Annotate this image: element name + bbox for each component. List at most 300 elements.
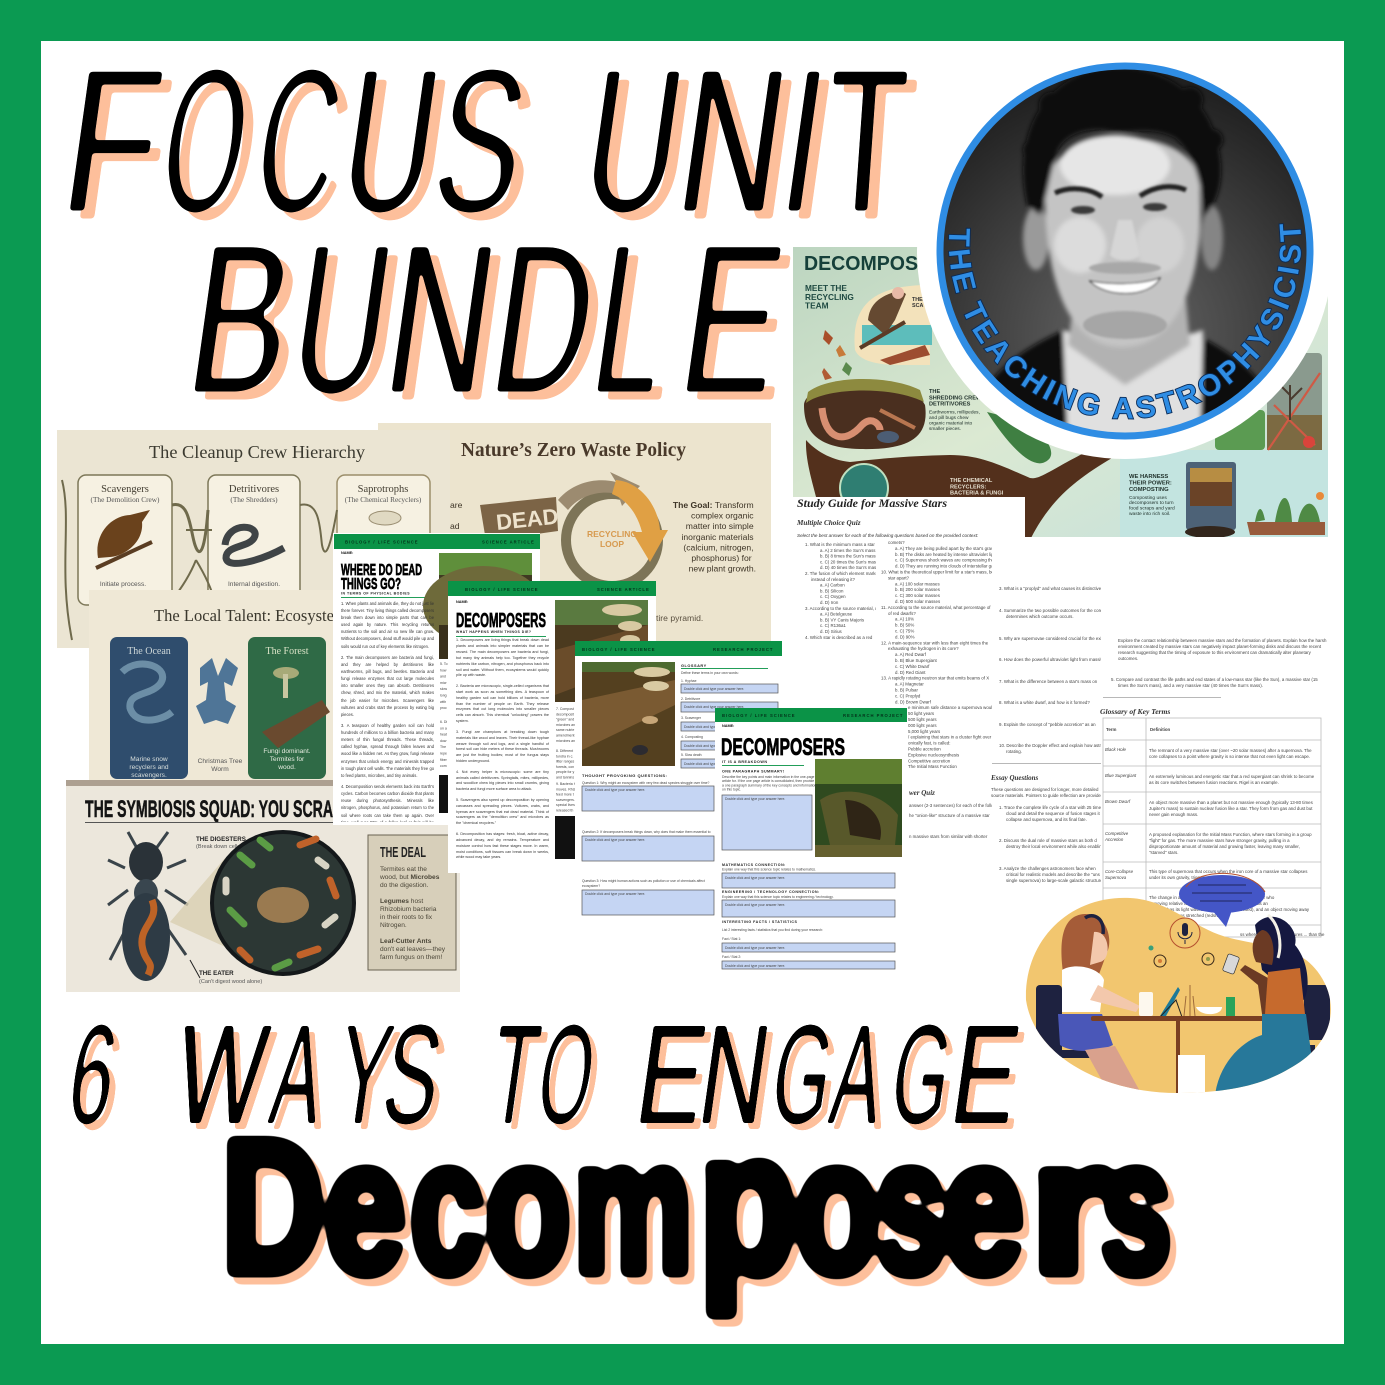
connection boxes: ENGINEERING / TECHNOLOGY CONNECTION: bbox=[722, 890, 820, 894]
title: Decomposers: c bbox=[410, 1101, 484, 1313]
table: glossary: Blue Supergiant bbox=[1105, 773, 1137, 778]
table: glossary: "fight" for gas. The more massive stars have stronger gravity, pulling in a bbox=[1149, 838, 1290, 843]
column one questions bbox=[805, 542, 876, 639]
right column sliver and callout: and tannins bbox=[556, 776, 574, 780]
right column sliver and callout: slow bbox=[440, 687, 447, 691]
labels: digesters and eater: THE EATER bbox=[199, 970, 234, 977]
table: glossary: ss where the extreme pressures ... than the bbox=[1240, 932, 1325, 937]
glossary section: 2. Detritivore bbox=[681, 697, 700, 701]
table: glossary: has its light waves stretched (redshifted). bbox=[1149, 913, 1229, 918]
column one questions: c. C) 20 times the Sun's mass bbox=[820, 559, 879, 564]
scene: chemical recyclers soil band: BACTERIA & FUNGI bbox=[950, 491, 1004, 497]
connection boxes: INTERESTING FACTS / STATISTICS bbox=[722, 920, 797, 924]
summary section: Describe the key points and main information in the one-page bbox=[722, 775, 814, 779]
title: 6 WAYS TO ENGAGE: Y bbox=[328, 996, 402, 1154]
column one questions: instead of releasing it? bbox=[811, 577, 855, 582]
connection boxes: Double click and type your answer here. bbox=[725, 964, 785, 968]
text: instructions: Select the best answer for each of the following questions based on the provided context: bbox=[797, 533, 979, 538]
card: The Forest: Fungi dominant. bbox=[263, 748, 311, 755]
right column sliver and callout: micr bbox=[440, 681, 447, 685]
title: FOCUS UNIT: U bbox=[330, 27, 452, 257]
glossary section: 4. Composting bbox=[681, 735, 703, 739]
doc text column: 2. Bacteria are microscopic, single-celled organisms that start work as soon as something dies. A teaspoon of healthy garden soil can hold billions of bacteria, more than the number of people on Earth. They release enzymes that cut long molecules into smaller pieces cells can absorb. This chemical "unlocking" powers the system. bbox=[456, 684, 549, 723]
title: FOCUS UNIT: O bbox=[150, 25, 262, 256]
column two questions: a. A) They are being pulled apart by the star's gravity. bbox=[895, 546, 998, 551]
card: Saprotrophs bbox=[337, 475, 430, 605]
doc text column: 6. Decomposition has stages: fresh, bloat, active decay, advanced decay, and dry remains. Temperature and moisture control how fast these stages move. In warm, moist conditions, soft tissues can break down in weeks, while wood may take years. bbox=[456, 832, 549, 859]
column two questions: 500 light years bbox=[908, 717, 937, 722]
scene: scavenger vulture: SCA bbox=[912, 303, 923, 309]
card: The Forest: Termites for bbox=[270, 756, 305, 763]
questions section: Question 1: Why might an ecosystem with very few dead species struggle over time? bbox=[582, 781, 710, 785]
glossary section: Double click and type your answer here. bbox=[684, 762, 744, 766]
labels: digesters and eater: (Can't digest wood alone) bbox=[199, 979, 262, 985]
card: The Ocean: Marine snow bbox=[130, 756, 168, 763]
labels: digesters and eater: THE DIGESTERS bbox=[196, 836, 246, 843]
doc header bar bbox=[575, 641, 782, 656]
right column sliver and callout: microbes an bbox=[556, 723, 575, 727]
portrait: the teaching astrophysicist bbox=[917, 62, 1328, 459]
text: we harness their power: THEIR POWER: bbox=[1129, 480, 1172, 486]
table: glossary: An object more massive than a planet but not massive enough (typically 13-80 times bbox=[1149, 800, 1314, 805]
table: glossary: Definition bbox=[1150, 727, 1171, 732]
doc header bar: BIOLOGY / LIFE SCIENCE bbox=[722, 713, 796, 718]
title: 6 WAYS TO ENGAGE bbox=[60, 995, 1029, 1154]
column two questions: c. C) Supernova shock waves are compressing them into that shape. bbox=[895, 558, 1029, 563]
title: BUNDLE: D bbox=[480, 200, 609, 438]
table: glossary: An extremely luminous and energetic star that a red supergiant can shrink to become bbox=[1149, 774, 1315, 779]
right column sliver and callout: how bbox=[440, 668, 447, 672]
column one questions: 1. What is the minimum mass a star needs bbox=[805, 542, 889, 547]
scene: chemical recyclers soil band bbox=[806, 412, 1112, 540]
heading: essay questions: Essay Questions bbox=[990, 774, 1039, 782]
panel: Nature's Zero Waste Policy slide: are bbox=[450, 500, 463, 510]
title: 6 WAYS TO ENGAGE: E bbox=[628, 995, 716, 1153]
title: FOCUS UNIT: N bbox=[666, 25, 800, 256]
right column sliver and callout: tundra in c. bbox=[556, 754, 573, 758]
table items bbox=[1091, 985, 1271, 1093]
doc title: WHERE DO DEAD bbox=[341, 562, 422, 579]
panel: Nature's Zero Waste Policy slide: ad bbox=[450, 521, 460, 531]
right column sliver and callout: decomposit bbox=[556, 712, 574, 716]
scene: chemical recyclers soil band: RECYCLERS: bbox=[950, 484, 986, 490]
icon: christmas tree worm: Worm bbox=[211, 766, 229, 773]
icon: christmas tree worm bbox=[196, 658, 243, 773]
short answer lines: 6. How does the powerful ultraviolet light from massive bbox=[999, 657, 1106, 662]
column one questions: a. A) Betelgeuse bbox=[820, 612, 853, 617]
title: FOCUS UNIT: I bbox=[770, 26, 838, 256]
title: 6 WAYS TO ENGAGE: W bbox=[167, 996, 277, 1153]
panel: research project doc - glossary bbox=[575, 641, 782, 923]
right column sliver and callout: released th bbox=[556, 808, 573, 812]
panel: article doc - where do dead things go bbox=[333, 533, 543, 825]
table: glossary: Jupiter's mass) to sustain nuclear fusion like a star. They form from gas and dust but bbox=[1149, 806, 1313, 811]
table: glossary: never gain enough mass. bbox=[1149, 812, 1198, 817]
column two questions: d. D) Brown Dwarf bbox=[895, 699, 932, 704]
panel: research project doc - decomposers summary: IT IS A BREAKDOWN bbox=[722, 760, 768, 764]
card: The Forest: The Forest bbox=[265, 646, 309, 657]
questions section: Double click and type your answer here. bbox=[585, 838, 645, 842]
text: meet the recycling team: MEET THE bbox=[805, 283, 847, 293]
title: BUNDLE bbox=[176, 200, 796, 439]
person left bbox=[1058, 914, 1142, 1095]
panel: research project doc - decomposers summary: NAME: bbox=[722, 724, 734, 728]
column one questions: a. A) 2 times the Sun's mass bbox=[820, 548, 876, 553]
callout: The Deal: Leaf-Cutter Ants bbox=[380, 938, 432, 945]
text: we harness their power: COMPOSTING bbox=[1129, 487, 1169, 493]
right column sliver and callout: moves. Rhiz bbox=[556, 787, 576, 791]
table: glossary: core collapses to a point where gravity is so intense that not even light can escape. bbox=[1149, 754, 1310, 759]
table: glossary: Brown Dwarf bbox=[1105, 799, 1131, 804]
summary section: Double click and type your answer here. bbox=[725, 797, 785, 801]
scene: leaves falling bbox=[822, 330, 852, 380]
right column sliver and callout: microbes an bbox=[556, 739, 575, 743]
text: meet the recycling team: TEAM bbox=[805, 301, 829, 311]
doc text column: 1. Decomposers are living things that break down dead plants and animals into simpler materials that can be reused. The main decomposers are bacteria and fungi, but many tiny animals help too. Together they recycle nutrients like carbon, nitrogen, and phosphorus back into soil and water. Without them, ecosystems would quickly pile up with waste. bbox=[456, 638, 549, 677]
connection boxes: Fact / Stat 2: bbox=[722, 955, 741, 959]
column two questions: c. C) White Dwarf bbox=[895, 664, 930, 669]
brows bbox=[1055, 187, 1186, 197]
questions section: ecosystem? bbox=[582, 884, 600, 888]
glossary section: Double click and type your answer here. bbox=[684, 687, 744, 691]
short answer lines: single supernova) to large-scale galactic structure bbox=[1006, 878, 1103, 883]
column one questions: d. D) Sirius bbox=[820, 629, 843, 634]
essay continued text: outcomes. bbox=[1118, 656, 1138, 661]
panel: article doc - decomposers: WHAT HAPPENS WHEN THINGS DIE? bbox=[456, 630, 531, 634]
scene: scavenger vulture: THE bbox=[912, 297, 923, 303]
doc title: DECOMPOSERS bbox=[721, 734, 845, 761]
callout: The Deal: Legumes host bbox=[380, 898, 423, 905]
title: FOCUS UNIT bbox=[51, 25, 913, 257]
text: meet the recycling team: RECYCLING bbox=[805, 292, 854, 302]
hair bbox=[1023, 67, 1221, 215]
doc photo: log illustration bbox=[582, 662, 675, 766]
right column sliver and callout bbox=[439, 662, 448, 813]
column two questions: / explaining that stars in a cluster fight over bbox=[908, 735, 992, 740]
icon: recycling loop: LOOP bbox=[600, 539, 624, 549]
text: we harness their power: waste into rich soil. bbox=[1129, 511, 1170, 517]
title: 6 WAYS TO ENGAGE: A bbox=[262, 995, 334, 1153]
callout: The Deal bbox=[368, 835, 456, 970]
text: shredding crew: smaller pieces. bbox=[929, 426, 961, 432]
column two questions: a. A) 10% bbox=[895, 617, 914, 622]
icon: compost bin bbox=[1185, 462, 1236, 538]
column two questions: d. D) 90% bbox=[895, 634, 915, 639]
summary section: a one paragraph summary of the key concepts and information bbox=[722, 783, 816, 787]
glossary section: 1. Hyphae bbox=[681, 679, 697, 683]
neck bbox=[1068, 290, 1190, 385]
summary section bbox=[722, 770, 817, 850]
title: 6 WAYS TO ENGAGE: O bbox=[529, 995, 604, 1153]
table: glossary: is moving relative to the source; an object moving towards an bbox=[1149, 901, 1268, 906]
table: glossary bbox=[1103, 718, 1325, 937]
column one questions: d. D) Iron bbox=[820, 600, 839, 605]
right column sliver and callout: feed more t bbox=[556, 793, 574, 797]
table: glossary: This type of supernova that occurs when the iron core of a massive star collapses bbox=[1149, 869, 1308, 874]
scene: shredding soil bbox=[804, 379, 926, 449]
right column sliver and callout: 6. Di bbox=[440, 720, 447, 724]
title: 6 WAYS TO ENGAGE: E bbox=[943, 995, 1029, 1153]
heading: study guide: Study Guide for Massive Stars bbox=[797, 497, 947, 510]
column two questions: b. B) The disks are heated by intense ultraviolet light, which drives material away bbox=[895, 552, 1053, 557]
column two questions: Explosive nucleosynthesis bbox=[908, 752, 960, 757]
labels: digesters and eater: (Break down cellulose) bbox=[196, 844, 253, 850]
column two questions: 10. What is the theoretical upper limit for a star's mass, beyond which the radiation bbox=[881, 570, 1042, 574]
connection boxes: List 2 interesting facts / statistics that you find during your research: bbox=[722, 928, 823, 932]
callout: The Deal: wood, but Microbes bbox=[380, 874, 439, 881]
callout: The Deal: farm fungus on them! bbox=[380, 954, 442, 961]
panel: article doc - decomposers bbox=[448, 581, 656, 873]
right column sliver and callout: com bbox=[440, 764, 447, 768]
doc text column bbox=[456, 638, 549, 862]
chairs bbox=[1036, 985, 1330, 1058]
column two questions: of red dwarfs? bbox=[888, 611, 916, 616]
glossary section bbox=[681, 663, 778, 768]
glossary section: 5. Slow death bbox=[681, 753, 702, 757]
right column sliver and callout: 7. Compost bbox=[556, 707, 574, 711]
card: The Forest: wood. bbox=[277, 764, 296, 771]
panel: study guide document: n massive stars from similar with shorter bbox=[909, 834, 988, 839]
short answer lines: 5. Why are supernovae considered crucial for the existence of planets like Earth bbox=[999, 636, 1155, 641]
text block: the goal: new plant growth. bbox=[689, 564, 756, 574]
table: glossary: "starved" stars. bbox=[1149, 850, 1178, 855]
doc header bar bbox=[334, 534, 540, 549]
table: glossary: Competitive bbox=[1105, 831, 1129, 836]
table: glossary: observer has its light waves compressed (blueshifted), and an object moving away bbox=[1149, 907, 1310, 912]
column two questions: The Initial Mass Function bbox=[908, 764, 957, 769]
card: Scavengers: Scavengers bbox=[101, 484, 149, 495]
doc text column: 5. Scavengers also speed up decomposition by opening carcasses and spreading pieces. Vultures, crabs, and hyenas are scavengers that eat dead material. Think of scavengers as the "demolition crew" and microbes as the "chemical recyclers." bbox=[456, 798, 549, 825]
column two questions: e minimum safe distance a supernova would bbox=[908, 705, 995, 710]
right column sliver and callout: 9. Bacteria h bbox=[556, 782, 576, 786]
text: we harness their power: food scraps and yard bbox=[1129, 506, 1175, 512]
heading: The Symbiosis Squad: THE SYMBIOSIS SQUAD: YOU SCRA bbox=[85, 796, 333, 823]
text: shredding crew: Earthworms, millipedes, bbox=[929, 410, 980, 416]
title: Decomposers: o bbox=[794, 1101, 880, 1313]
glossary section: Double click and type your answer here. bbox=[684, 705, 744, 709]
card: Scavengers bbox=[78, 475, 172, 605]
right column sliver and callout: dow bbox=[440, 739, 447, 743]
column two questions: a. A) Magnetar bbox=[895, 682, 924, 687]
short answer lines: rotating. bbox=[1006, 749, 1022, 754]
text: we harness their power: WE HARNESS bbox=[1129, 474, 1168, 480]
right column sliver and callout: same nutrie bbox=[556, 728, 574, 732]
right column sliver and callout: 8. Different bbox=[556, 749, 573, 753]
column two questions: star apart? bbox=[888, 575, 910, 580]
callout: The Deal: don't eat leaves—they bbox=[380, 946, 446, 953]
title: FOCUS UNIT: C bbox=[244, 26, 354, 257]
title: Decomposers: e bbox=[324, 1101, 406, 1312]
short answer lines bbox=[991, 586, 1101, 883]
column one questions: b. B) VY Canis Majoris bbox=[820, 617, 865, 622]
panel: decomposers poster bbox=[793, 247, 1328, 540]
icon: raised bed bbox=[1247, 492, 1325, 535]
scene: scavenger vulture bbox=[854, 285, 932, 365]
card: Saprotrophs: Saprotrophs bbox=[358, 484, 408, 495]
vines bbox=[62, 480, 337, 640]
short answer lines: critical for realistic models and describe the "uns bbox=[1006, 872, 1101, 877]
smile bbox=[1090, 278, 1160, 293]
title: FOCUS UNIT: U bbox=[572, 26, 695, 256]
doc text column: 4. Not every helper is microscopic: some are tiny animals called detritivores. Springtails, mites, millipedes, and woodlice chew big pieces into small crumbs, giving bacteria and fungi more surface area to attack. bbox=[456, 770, 549, 791]
column two questions: 5,000 light years bbox=[908, 729, 941, 734]
doc header bar: SCIENCE ARTICLE bbox=[597, 587, 650, 592]
column two questions: b. B) Blue Supergiant bbox=[895, 658, 938, 663]
ears bbox=[1023, 206, 1049, 270]
title: BUNDLE: L bbox=[581, 200, 682, 439]
column two questions: c. C) 75% bbox=[895, 628, 914, 634]
panel: study guide document: answer (2-3 sentences) for each of the following bbox=[909, 803, 1003, 808]
title: BUNDLE: B bbox=[176, 200, 307, 439]
short answer heading: wer Quiz bbox=[909, 789, 935, 797]
right column sliver and callout: forests, con bbox=[556, 765, 574, 769]
column one questions: d. D) 40 times the Sun's mass bbox=[820, 565, 879, 570]
table: glossary: Core-Collapse bbox=[1105, 869, 1134, 874]
column two questions: b. B) Pulsar bbox=[895, 688, 918, 692]
moustache shadow bbox=[1089, 262, 1161, 274]
card: Detritivores bbox=[208, 475, 300, 605]
title: 6 WAYS TO ENGAGE: A bbox=[822, 995, 894, 1153]
illustration: podcast blob bbox=[1026, 873, 1331, 1095]
callout: The Deal: THE DEAL bbox=[380, 844, 426, 861]
short answer lines: cloud and detail the sequence of fusion stages it bbox=[1006, 811, 1101, 816]
panel: study guide document: he "onion-like" structure of a massive star bbox=[909, 813, 990, 818]
connection boxes: Double click and type your answer here. bbox=[725, 876, 785, 880]
card: Detritivores: Detritivores bbox=[229, 484, 279, 495]
callout: The Deal: Termites eat the bbox=[380, 866, 427, 873]
connection boxes: MATHEMATICS CONNECTION: bbox=[722, 863, 786, 867]
table: glossary: as its core switches between fusion reactions. Rigel is an example. bbox=[1149, 780, 1279, 785]
doc text column bbox=[341, 600, 434, 822]
column two questions: d. D) Red Giant bbox=[895, 670, 926, 675]
column two questions: a. A) Red Dwarf bbox=[895, 652, 927, 657]
right column sliver and callout: The bbox=[440, 745, 446, 749]
column two questions: c. C) 300 solar masses bbox=[895, 593, 941, 598]
icon: recycling loop: DEAD bbox=[495, 504, 560, 535]
doc header bar: BIOLOGY / LIFE SCIENCE bbox=[345, 540, 419, 544]
column one questions: 2. The fusion of which element marks bbox=[805, 571, 878, 576]
text block: the goal: The Goal: Transform bbox=[673, 500, 754, 510]
column two questions: 12. A main-sequence star with less than eight times the bbox=[881, 640, 989, 645]
column two questions: a. A) 100 solar masses bbox=[895, 581, 940, 586]
short answer lines: 2. Discuss the dual role of massive stars as both d bbox=[999, 838, 1097, 843]
text block: the goal: complex organic bbox=[691, 511, 754, 521]
column one questions: 3. According to the source material, which bbox=[805, 606, 887, 611]
glossary section: GLOSSARY bbox=[681, 663, 707, 668]
summary section: ONE PARAGRAPH SUMMARY! bbox=[722, 770, 784, 774]
short answer lines: collapse and supernova, and its final fate. bbox=[1006, 817, 1087, 822]
right column sliver and callout: people for y bbox=[556, 770, 575, 774]
column one questions: a. A) Carbon bbox=[820, 583, 845, 588]
face bbox=[1045, 138, 1201, 347]
doc header bar: SCIENCE ARTICLE bbox=[482, 540, 535, 544]
short answer lines: source materials. Pointers to guide reflection are provided bbox=[991, 793, 1104, 798]
right column sliver and callout: scavengers. bbox=[556, 798, 575, 802]
short answer lines: These questions are designed for longer, more detailed bbox=[991, 787, 1099, 792]
short answer lines: 10. Describe the Doppler effect and explain how astronomers bbox=[999, 743, 1119, 748]
scene: chemical recyclers soil band: THE CHEMICAL bbox=[950, 478, 993, 484]
chart: microbe circle bbox=[212, 832, 354, 974]
right column sliver and callout: 5. To bbox=[440, 662, 448, 666]
right column sliver and callout bbox=[555, 707, 576, 859]
panel: The Symbiosis Squad slide bbox=[66, 780, 460, 992]
doc photo: mossy mound bbox=[423, 553, 543, 659]
callout: The Deal: Nitrogen. bbox=[380, 922, 407, 929]
title: 6 WAYS TO ENGAGE: G bbox=[883, 995, 961, 1153]
short answer lines: 8. What is a white dwarf, and how is it formed? bbox=[999, 700, 1090, 705]
card: Scavengers: (The Demolition Crew) bbox=[91, 495, 160, 504]
panel: Nature's Zero Waste Policy slide: tire pyramid. bbox=[656, 613, 703, 623]
doc text column: 2. The main decomposers are bacteria and fungi, and they are helped by detritivores like earthworms, pill bugs, and beetles. Bacteria and fungi release enzymes that cut large molecules into smaller ones they can absorb. Detritivores chew, shred, and mix the material, which makes the job easier for microbes. Scavengers like vultures and crabs start the process by eating big pieces. bbox=[341, 655, 434, 717]
text: shredding crew: SHREDDING CREW: bbox=[929, 395, 983, 401]
callout: The Deal: do the digestion. bbox=[380, 882, 429, 889]
questions section bbox=[582, 773, 714, 915]
title: 6 WAYS TO ENGAGE: 6 bbox=[60, 996, 125, 1154]
callout: The Deal: Rhizobium bacteria bbox=[380, 906, 437, 913]
nose bbox=[1110, 220, 1140, 260]
essay continued text: research suggesting that the timing of exposure to this environment can dramatically alter planetary bbox=[1118, 650, 1312, 655]
short answer lines: 4. Summarize the two possible outcomes for the core of a massive star after a supernova bbox=[999, 608, 1173, 613]
heading: The Cleanup Crew Hierarchy: The Cleanup Crew Hierarchy bbox=[149, 442, 365, 462]
shirt bbox=[1063, 330, 1203, 445]
text: shredding crew: organic material into bbox=[929, 420, 973, 426]
icon: heart and coffee bubbles bbox=[1148, 946, 1214, 967]
person right upper body bbox=[1222, 915, 1308, 1014]
icon: recycling loop bbox=[480, 472, 668, 586]
connection boxes: Double click and type your answer here. bbox=[725, 903, 785, 907]
title: FOCUS UNIT: F bbox=[51, 26, 174, 256]
column two questions: onically fast, is called: bbox=[908, 741, 950, 746]
connection boxes: Explain one way that this science topic relates to engineering / technology. bbox=[722, 895, 834, 899]
suit bbox=[993, 330, 1257, 424]
title: FOCUS UNIT: T bbox=[819, 27, 913, 256]
doc photo: log with mushrooms bbox=[555, 600, 648, 702]
icon: recycling loop: RECYCLING bbox=[587, 529, 637, 539]
person right lower body bbox=[1215, 1014, 1312, 1095]
panel: study guide document bbox=[793, 497, 1328, 937]
short answer lines: 1. Trace the complete life cycle of a star with 25 times bbox=[999, 805, 1104, 810]
column two questions: Competitive accretion bbox=[908, 758, 951, 763]
column two questions: 000 light years bbox=[908, 723, 937, 728]
table: glossary: The change in a wave's frequency in relation to an observer who bbox=[1149, 895, 1275, 900]
column two questions: d. D) 500 solar masses bbox=[895, 599, 941, 604]
summary section: on this topic. bbox=[722, 788, 741, 792]
heading: DECOMPOS: DECOMPOS bbox=[804, 253, 918, 275]
table: glossary: A proposed explanation for the Initial Mass Function, where stars forming in a group bbox=[1149, 832, 1312, 837]
title: BUNDLE: N bbox=[374, 200, 509, 439]
panel: research project doc - decomposers summary bbox=[715, 708, 907, 972]
column two questions: c. C) Proplyd bbox=[895, 693, 921, 698]
table: glossary: The remnant of a very massive star (over ~20 solar masses) after a supernova. The bbox=[1149, 748, 1312, 753]
panel: article doc - where do dead things go: NAME: bbox=[341, 551, 353, 555]
text: shredding crew: and pill bugs chew bbox=[929, 415, 969, 421]
card: The Ocean: recyclers and bbox=[129, 764, 169, 771]
title: Decomposers: D bbox=[222, 1100, 324, 1313]
title: Decomposers bbox=[222, 1090, 1172, 1315]
card: The Ocean bbox=[110, 637, 188, 779]
cone: magnification bbox=[170, 858, 232, 950]
title: Decomposers: e bbox=[942, 1101, 1024, 1313]
card: Scavengers: Initiate process. bbox=[100, 581, 146, 588]
icon: blue speech bubble bbox=[1179, 873, 1265, 927]
card: Detritivores: (The Shredders) bbox=[230, 495, 278, 504]
panel: article doc - where do dead things go: IN TERMS OF PHYSICAL BODIES bbox=[341, 592, 410, 596]
right column sliver and callout: heat bbox=[440, 733, 447, 737]
doc header bar: RESEARCH PROJECT bbox=[843, 713, 903, 718]
glossary section: Double click and type your answer here. bbox=[684, 744, 744, 748]
title: 6 WAYS TO ENGAGE: G bbox=[763, 995, 843, 1153]
title: 6 WAYS TO ENGAGE: N bbox=[691, 997, 779, 1154]
